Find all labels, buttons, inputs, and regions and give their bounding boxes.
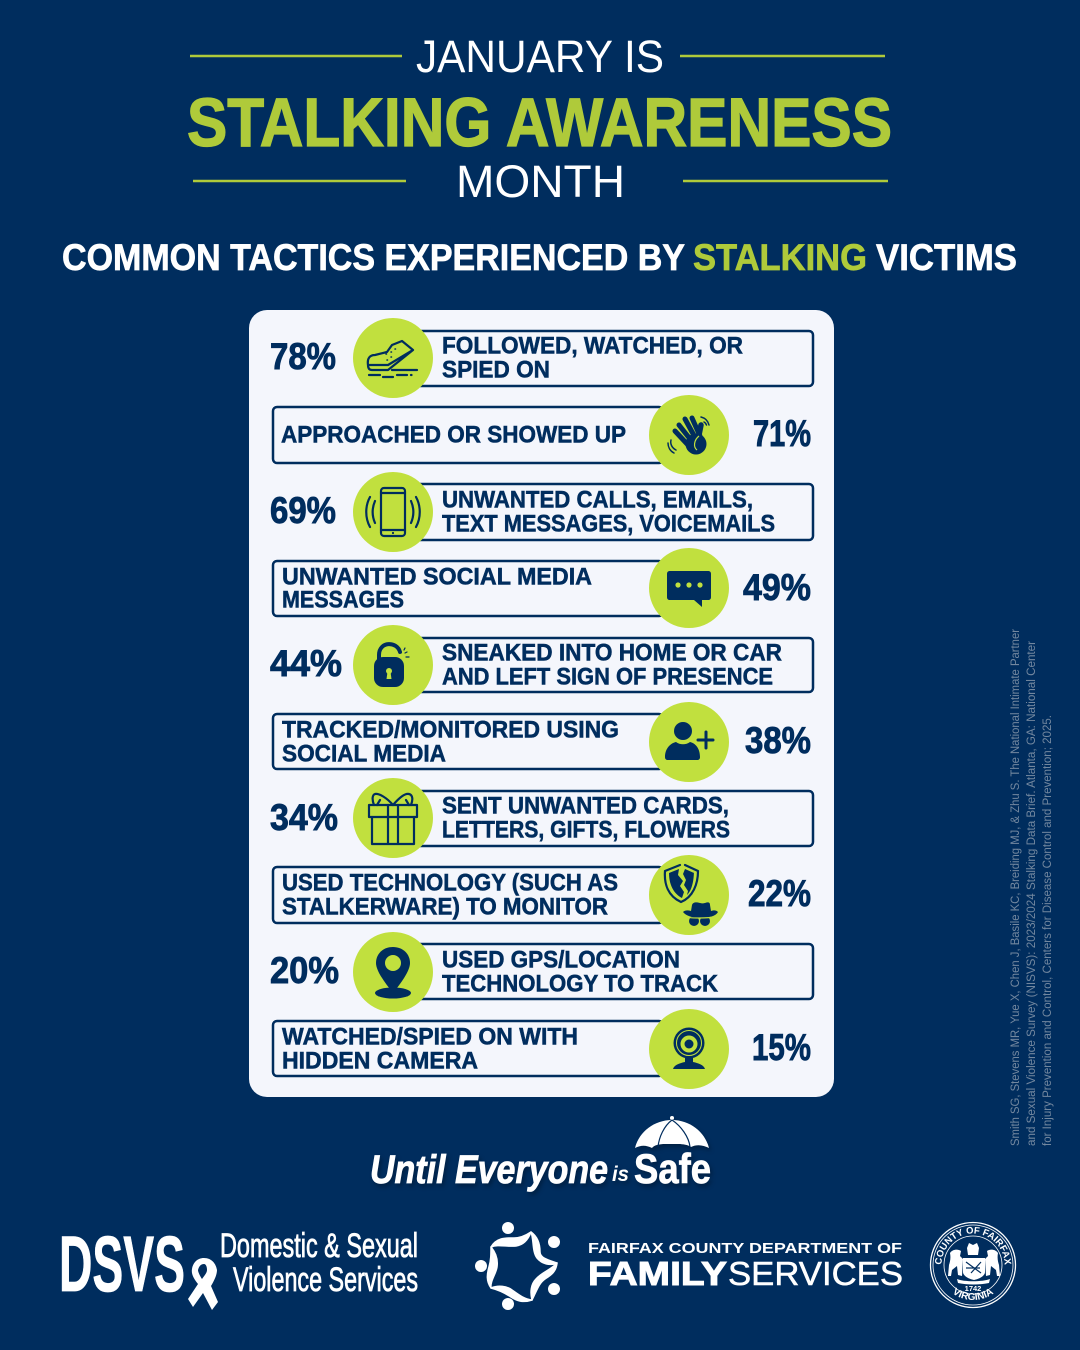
label: LETTERS, GIFTS, FLOWERS: [442, 816, 730, 843]
logo: DSVS: Violence Services: [233, 1261, 418, 1299]
logo: County of Fairfax seal: 1742: [965, 1284, 981, 1293]
citation: and Sexual Violence Survey (NISVS): 2023/2024 Stalking Data Brief. Atlanta, GA: National Center: [1026, 641, 1038, 1146]
icon: vibrating phone: [353, 472, 433, 552]
row: sneaked 44%: [270, 625, 813, 705]
label: APPROACHED OR SHOWED UP: [281, 421, 626, 448]
row: followed 78%: [270, 318, 813, 398]
label: SOCIAL MEDIA: [282, 740, 446, 767]
citation: Smith SG, Stevens MR, Yue X, Chen J, Basile KC, Breiding MJ, & Zhu S. The National Intimate Partner: [1010, 629, 1022, 1146]
label: [442, 946, 719, 997]
subtitle: COMMON TACTICS EXPERIENCED BY: [62, 237, 685, 278]
label: SPIED ON: [442, 356, 550, 383]
percentage: 78%: 78%: [270, 336, 336, 377]
logo: DSVS: [59, 1219, 418, 1310]
icon: person with plus: [649, 702, 729, 782]
row: GPS 20%: [270, 932, 813, 1012]
label: [442, 639, 782, 690]
icon: coat of arms: [948, 1243, 1000, 1284]
row: tracked 38%: [273, 702, 811, 782]
label: TECHNOLOGY TO TRACK: [442, 970, 719, 997]
subtitle: VICTIMS: [876, 237, 1017, 278]
percentage: 44%: 44%: [270, 643, 342, 684]
label: MESSAGES: [282, 586, 404, 613]
logo: DSVS: Domestic & Sexual: [220, 1227, 418, 1265]
label: SENT UNWANTED CARDS,: [442, 792, 729, 819]
logo: County of Fairfax seal: [930, 1222, 1016, 1308]
icon: awareness ribbon: [188, 1258, 218, 1310]
row: gifts 34%: [270, 778, 813, 858]
label: FOLLOWED, WATCHED, OR: [442, 332, 743, 359]
label: WATCHED/SPIED ON WITH: [282, 1023, 578, 1050]
label: [442, 332, 743, 383]
label: AND LEFT SIGN OF PRESENCE: [442, 663, 773, 690]
label: TEXT MESSAGES, VOICEMAILS: [442, 510, 775, 537]
slogan: Until Everyone is Safe: Until Everyone: [370, 1148, 608, 1192]
logo: County of Fairfax seal: VIRGINIA: [954, 1287, 994, 1300]
label: [282, 716, 619, 767]
label: [282, 869, 618, 920]
label: TRACKED/MONITORED USING: [282, 716, 619, 743]
label: [442, 486, 775, 537]
citation: [1010, 629, 1054, 1146]
label: SNEAKED INTO HOME OR CAR: [442, 639, 782, 666]
citation: for Injury Prevention and Control, Centers for Disease Control and Prevention; 2025.: [1042, 715, 1054, 1146]
title: [187, 31, 892, 207]
panel: tactics list: [249, 310, 834, 1097]
icon: broken shield and spy hat: [649, 855, 729, 935]
title: MONTH: [456, 156, 625, 207]
label: HIDDEN CAMERA: [282, 1047, 478, 1074]
slogan: Until Everyone is Safe: is: [612, 1163, 629, 1186]
percentage: 71%: 71%: [753, 413, 811, 454]
logo: Fairfax County Department of Family Services: [475, 1222, 903, 1310]
icon: shoe: [353, 318, 433, 398]
icon: gift box: [353, 778, 433, 858]
slogan: Until Everyone is Safe: [370, 1116, 711, 1192]
row: social messages 49%: [273, 548, 811, 628]
title: JANUARY IS: [416, 31, 664, 82]
row: hidden camera 15%: [273, 1009, 811, 1089]
icon: webcam: [649, 1009, 729, 1089]
department name: [588, 1241, 903, 1292]
label: [282, 1023, 578, 1074]
department name: FAIRFAX COUNTY DEPARTMENT OF: [588, 1241, 902, 1257]
title: STALKING AWARENESS: [187, 84, 892, 161]
logo: County of Fairfax seal: COUNTY OF FAIRFAX: [935, 1226, 1012, 1265]
percentage: 34%: 34%: [270, 797, 338, 838]
department name: SERVICES: [728, 1255, 903, 1292]
label: STALKERWARE) TO MONITOR: [282, 893, 608, 920]
percentage: 22%: 22%: [748, 873, 811, 914]
label: [442, 792, 730, 843]
logo: DSVS: DSVS: [59, 1219, 185, 1308]
row: calls 69%: [270, 472, 813, 552]
row: technology 22%: [273, 855, 811, 935]
percentage: 20%: 20%: [270, 950, 339, 991]
icon: waving hand: [649, 395, 729, 475]
icon: chat bubble: [649, 548, 729, 628]
icon: umbrella: [635, 1116, 709, 1148]
label: UNWANTED CALLS, EMAILS,: [442, 486, 753, 513]
subtitle: STALKING: [693, 237, 867, 278]
icon: open padlock: [353, 625, 433, 705]
label: [282, 563, 592, 613]
label: USED TECHNOLOGY (SUCH AS: [282, 869, 618, 896]
label: UNWANTED SOCIAL MEDIA: [282, 563, 592, 590]
department name: FAMILY: [588, 1255, 727, 1292]
percentage: 69%: 69%: [270, 490, 336, 531]
slogan: Until Everyone is Safe: Safe: [634, 1145, 711, 1192]
percentage: 15%: 15%: [752, 1027, 811, 1068]
percentage: 38%: 38%: [745, 720, 811, 761]
icon: location pin: [353, 932, 433, 1012]
percentage: 49%: 49%: [743, 567, 811, 608]
row: approached 71%: [273, 395, 811, 475]
label: USED GPS/LOCATION: [442, 946, 680, 973]
icon: circle of people: [475, 1222, 560, 1310]
